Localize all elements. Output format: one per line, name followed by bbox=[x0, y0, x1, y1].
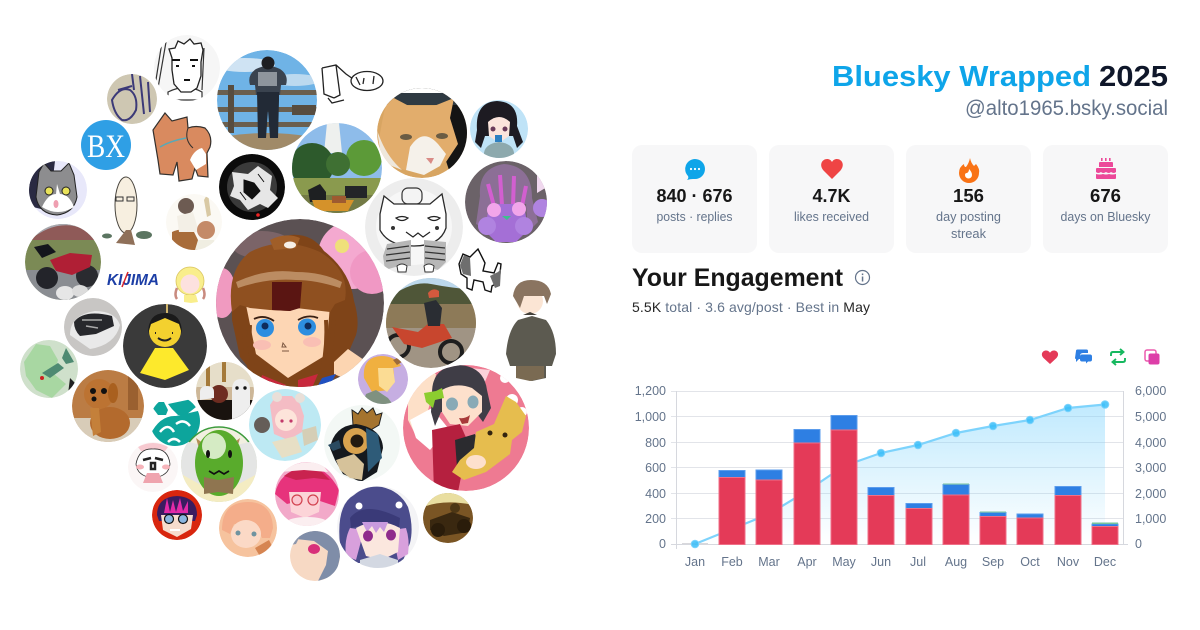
month labels: Aug bbox=[945, 555, 967, 569]
left axis labels: 1,200 bbox=[635, 384, 666, 398]
month labels: Jul bbox=[910, 555, 926, 569]
line: cumulative engagement bbox=[695, 404, 1105, 544]
icon: flame bbox=[959, 158, 979, 183]
avatar: pink chibi bbox=[249, 389, 321, 461]
month labels: Jun bbox=[871, 555, 891, 569]
right axis labels: 3,000 bbox=[1135, 461, 1166, 475]
month labels: May bbox=[832, 555, 857, 569]
avatar: teal sunglasses bbox=[152, 400, 200, 446]
month labels: Feb bbox=[721, 555, 743, 569]
left axis labels: 800 bbox=[645, 436, 666, 450]
avatar: pink hair glasses bbox=[275, 462, 339, 527]
combo chart: monthly engagement bbox=[635, 384, 1166, 569]
month labels: Oct bbox=[1020, 555, 1040, 569]
avatar: dirt bike rider bbox=[386, 278, 476, 368]
left axis labels: 1,000 bbox=[635, 410, 666, 424]
stat card: posts and replies: posts · replies bbox=[656, 209, 733, 224]
avatar: blonde cap girl bbox=[358, 354, 408, 406]
right axis labels: 5,000 bbox=[1135, 410, 1166, 424]
stat card: likes: 4.7K bbox=[812, 186, 850, 206]
area: cumulative engagement bbox=[695, 404, 1105, 544]
icon: reposts bbox=[1111, 349, 1125, 365]
avatar: yellow chick bbox=[176, 267, 204, 303]
avatar: blue hood girl bbox=[337, 486, 419, 570]
left axis labels bbox=[635, 384, 666, 551]
icon: cake bbox=[1096, 158, 1116, 179]
month labels: Nov bbox=[1057, 555, 1080, 569]
avatar: rider at fence bbox=[215, 50, 320, 153]
heading: your engagement: Your Engagement bbox=[632, 264, 844, 292]
avatar: yellow doll bbox=[123, 303, 207, 388]
right axis labels: 6,000 bbox=[1135, 384, 1166, 398]
icon: info bbox=[856, 270, 870, 284]
avatar: tree man bbox=[102, 177, 152, 245]
bars: monthly stacks bbox=[682, 416, 1118, 544]
icon: chat bubble bbox=[685, 159, 705, 180]
stat card: days on Bluesky bbox=[1043, 145, 1168, 253]
stat card: likes bbox=[769, 145, 894, 253]
avatar: red hood glasses bbox=[152, 490, 202, 540]
month labels bbox=[685, 555, 1116, 569]
avatar: fox girl bbox=[403, 365, 529, 492]
avatar: sepia motorcycle bbox=[423, 493, 473, 543]
engagement summary: 5.5K total · 3.6 avg/post · Best in May bbox=[632, 299, 870, 315]
month labels: Sep bbox=[982, 555, 1004, 569]
stat card: posts and replies: 840 · 676 bbox=[656, 186, 732, 206]
avatar: main anime girl bbox=[216, 219, 384, 387]
avatar: gray cat bbox=[29, 161, 87, 219]
avatar: BX logo bbox=[81, 120, 131, 170]
stat card: likes: likes received bbox=[794, 209, 869, 224]
right axis labels bbox=[1135, 384, 1166, 551]
avatar: pink white bear bbox=[128, 442, 178, 492]
right axis labels: 1,000 bbox=[1135, 512, 1166, 526]
avatar cloud bbox=[20, 35, 556, 581]
avatar: green mech bbox=[20, 340, 78, 398]
avatar: brown-haired figure in cloak bbox=[506, 280, 556, 381]
avatar: gray-haired girl bbox=[290, 531, 340, 581]
grid lines bbox=[671, 391, 1128, 549]
stat card: streak: streak bbox=[951, 226, 986, 241]
avatar: red motorcycle bbox=[25, 224, 101, 302]
avatar: calico cat bbox=[459, 249, 501, 292]
stat card: posts and replies bbox=[632, 145, 757, 253]
avatar: shiba dog bbox=[153, 113, 211, 181]
avatar: peach-haired girl bbox=[219, 499, 277, 558]
month labels: Apr bbox=[797, 555, 817, 569]
avatar: park with motorcycle bbox=[290, 123, 382, 213]
avatar: sketch man bbox=[154, 35, 220, 101]
right axis labels: 0 bbox=[1135, 537, 1142, 551]
left axis labels: 400 bbox=[645, 487, 666, 501]
avatar: Kijima logo: KIJIMA bbox=[107, 272, 159, 289]
line points bbox=[691, 401, 1109, 548]
month labels: Mar bbox=[758, 555, 780, 569]
avatar: ghosts bbox=[196, 362, 254, 420]
right axis labels: 2,000 bbox=[1135, 487, 1166, 501]
avatar: sketch head bbox=[322, 65, 383, 103]
stat card: days on Bluesky: 676 bbox=[1090, 186, 1121, 206]
handle: @alto1965.bsky.social bbox=[965, 97, 1168, 120]
stat card: streak: day posting bbox=[936, 209, 1001, 224]
avatar: helmet bbox=[64, 298, 122, 356]
icon: likes bbox=[1042, 350, 1058, 364]
avatar: purple character bbox=[465, 161, 551, 243]
avatar: BX logo: BX bbox=[87, 129, 125, 165]
right axis labels: 4,000 bbox=[1135, 436, 1166, 450]
avatar: old pen sketch bbox=[107, 74, 157, 124]
icon: quotes bbox=[1145, 350, 1160, 364]
month labels: Dec bbox=[1094, 555, 1116, 569]
avatar: poodle bbox=[72, 370, 144, 442]
icon: replies bbox=[1075, 350, 1092, 364]
stat card: days on Bluesky: days on Bluesky bbox=[1060, 209, 1151, 224]
stat card: streak: 156 bbox=[953, 186, 984, 206]
avatar: white cat with scarf bbox=[365, 178, 463, 276]
title: Bluesky Wrapped bbox=[832, 61, 1091, 93]
icon: heart bbox=[821, 159, 843, 179]
avatar: orange cat bbox=[375, 86, 469, 178]
left axis labels: 200 bbox=[645, 512, 666, 526]
avatar: green egg bbox=[181, 427, 257, 504]
left axis labels: 600 bbox=[645, 461, 666, 475]
avatar: black tiger emblem bbox=[219, 154, 285, 220]
avatar: anime girls bbox=[166, 193, 222, 253]
title: 2025 bbox=[1099, 61, 1168, 93]
chart legend icons bbox=[1042, 349, 1160, 365]
left axis labels: 0 bbox=[659, 537, 666, 551]
stat card: streak bbox=[906, 145, 1031, 253]
month labels: Jan bbox=[685, 555, 705, 569]
avatar: crowned owl bbox=[324, 405, 400, 482]
avatar: black twin-tail girl bbox=[470, 100, 528, 158]
